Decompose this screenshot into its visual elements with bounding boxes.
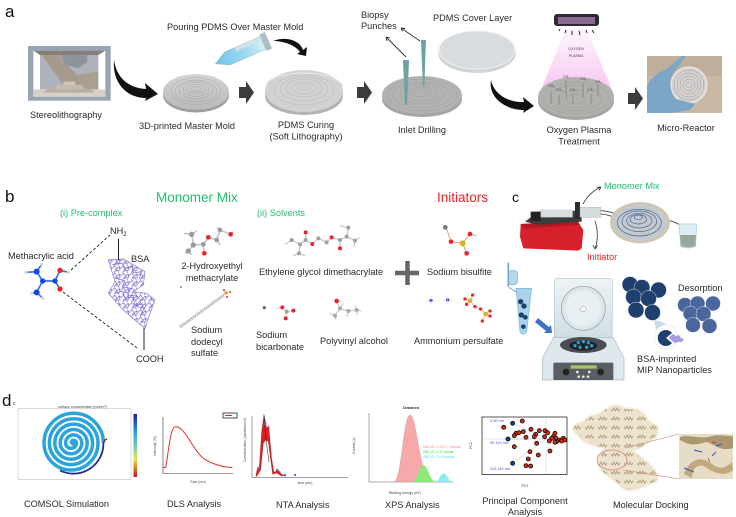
XPS spectrum chart: 288.12: C=O bonds bbox=[423, 455, 454, 459]
pre-complex labels: 2 bbox=[123, 232, 127, 238]
principal component scatter plot: 0-90 nm bbox=[490, 419, 504, 423]
step captions bbox=[30, 10, 715, 146]
plasma treated disc: CH₃ bbox=[556, 88, 563, 92]
HEMA caption: 2-Hydroxyethyl bbox=[181, 261, 243, 271]
SDS caption: dodecyl bbox=[191, 337, 223, 347]
tubing and microreactor chip bbox=[601, 202, 680, 243]
NTA concentration chart: size (nm) bbox=[298, 481, 312, 485]
monomer mix label: Monomer Mix bbox=[604, 181, 660, 191]
sodium bicarbonate caption: Sodium bbox=[256, 330, 287, 340]
XPS spectrum chart: Deashed bbox=[403, 406, 420, 410]
plasma label bbox=[568, 47, 584, 58]
EGDMA caption: Ethylene glycol dimethacrylate bbox=[259, 267, 383, 277]
DLS intensity chart bbox=[153, 413, 237, 484]
porous particle cluster bbox=[678, 296, 720, 334]
HEMA caption: methacrylate bbox=[186, 273, 238, 283]
characterisation captions: COMSOL Simulation bbox=[24, 499, 109, 509]
inlet drilling disc with punches bbox=[382, 28, 462, 117]
block arrow 3 bbox=[628, 87, 643, 110]
plasma treated disc: CH₃ bbox=[548, 84, 555, 88]
step captions: (Soft Lithography) bbox=[269, 132, 343, 142]
plasma treated disc: CH₃ bbox=[595, 80, 602, 84]
molecular docking protein surface bbox=[573, 405, 680, 490]
micro-reactor photo bbox=[647, 56, 722, 113]
BSA connector lines bbox=[118, 239, 144, 350]
plasma treated disc: CH₃ bbox=[563, 75, 570, 79]
SDS caption bbox=[191, 325, 223, 358]
panel b: reagents bbox=[5, 187, 503, 364]
dashed links to BSA bbox=[63, 235, 137, 348]
step captions: Micro-Reactor bbox=[657, 123, 715, 133]
sodium dodecyl sulfate molecule bbox=[180, 286, 231, 327]
label b: b bbox=[5, 187, 14, 206]
pre-complex labels bbox=[8, 226, 164, 364]
heading: initiators: Initiators bbox=[437, 190, 488, 205]
centrifuge bbox=[542, 278, 624, 380]
BSA-imprinted caption: BSA-imprinted bbox=[637, 354, 696, 364]
pre-complex labels: NH bbox=[110, 226, 123, 236]
principal component scatter plot: PC1 bbox=[522, 484, 528, 488]
polyvinyl alcohol molecule bbox=[330, 299, 362, 320]
characterisation captions: NTA Analysis bbox=[276, 500, 330, 510]
label c: c bbox=[512, 189, 519, 205]
characterisation captions: XPS Analysis bbox=[385, 500, 440, 510]
HEMA caption bbox=[181, 261, 243, 283]
step captions: PDMS Curing bbox=[278, 120, 334, 130]
sodium bicarbonate caption: bicarbonate bbox=[256, 342, 304, 352]
plasma beam bbox=[540, 29, 613, 92]
microcentrifuge tube bbox=[508, 263, 532, 334]
pre-complex labels: BSA bbox=[131, 254, 150, 264]
characterisation captions: Analysis bbox=[508, 507, 543, 517]
principal component scatter plot: 90-110 nm bbox=[490, 441, 508, 445]
syringe pump bbox=[520, 202, 601, 251]
principal component scatter plot: PC2 bbox=[469, 442, 473, 449]
panel d: characterisation bbox=[2, 391, 733, 517]
XPS spectrum chart bbox=[352, 406, 461, 495]
desorption caption: Desorption bbox=[678, 283, 722, 293]
blue arrow bbox=[535, 318, 552, 333]
ammonium persulfate molecule bbox=[426, 293, 492, 323]
plasma label: OXYGEN bbox=[568, 47, 584, 51]
monomer and initiator pointer arrows bbox=[583, 187, 601, 249]
step captions: 3D-printed Master Mold bbox=[139, 121, 235, 131]
step captions: Oxygen Plasma bbox=[547, 125, 612, 135]
sodium bisulfite molecule bbox=[443, 225, 476, 256]
BSA protein mesh bbox=[108, 259, 155, 328]
3D-printed master mold disc bbox=[163, 74, 229, 112]
principal component scatter plot: 110-140 nm bbox=[490, 467, 510, 471]
sodium bicarbonate molecule bbox=[263, 305, 295, 320]
characterisation captions: Molecular Docking bbox=[613, 500, 689, 510]
heading: monomer mix: Monomer Mix bbox=[156, 190, 238, 205]
characterisation captions bbox=[24, 496, 689, 517]
step captions: Inlet Drilling bbox=[398, 125, 446, 135]
COMSOL simulation plot: c bbox=[13, 401, 16, 407]
ethylene glycol dimethacrylate molecule bbox=[285, 226, 359, 256]
label a: a bbox=[5, 2, 15, 21]
BSA-imprinted caption: MIP Nanoparticles bbox=[637, 365, 712, 375]
NTA concentration chart: Concentration (particles/ml) bbox=[243, 418, 247, 462]
sodium bisulfite caption: Sodium bisulfite bbox=[427, 267, 492, 277]
PVA caption: Polyvinyl alcohol bbox=[320, 336, 388, 346]
MIP nanoparticle cluster bbox=[622, 276, 666, 320]
pre-complex labels: Methacrylic acid bbox=[8, 251, 74, 261]
ammonium persulfate caption: Ammonium persulfate bbox=[414, 336, 503, 346]
XPS spectrum chart: Counts (s) bbox=[352, 437, 356, 454]
pre-complex labels: COOH bbox=[136, 354, 164, 364]
characterisation captions: Principal Component bbox=[482, 496, 568, 506]
2-hydroxyethyl methacrylate molecule bbox=[184, 228, 233, 256]
collection beaker bbox=[679, 224, 697, 248]
SDS caption: sulfate bbox=[191, 348, 218, 358]
curved arrow: printer to mold bbox=[114, 60, 158, 101]
characterisation captions: DLS Analysis bbox=[167, 499, 222, 509]
panel a: fabrication workflow bbox=[5, 2, 722, 146]
block arrow 2 bbox=[357, 81, 372, 104]
magnified imprinted particle bbox=[654, 320, 684, 349]
step captions: Punches bbox=[361, 21, 397, 31]
docking site inset bbox=[679, 434, 733, 479]
PDMS pouring tube bbox=[212, 32, 272, 72]
BSA-imprinted caption bbox=[637, 354, 712, 375]
step captions: Stereolithography bbox=[30, 110, 102, 120]
PDMS cover layer disc bbox=[438, 31, 516, 73]
initiator label: Initiator bbox=[587, 252, 617, 262]
XPS spectrum chart: 284.15: C-C/C-H bonds bbox=[423, 445, 461, 449]
SDS caption: Sodium bbox=[191, 325, 222, 335]
plasma treated disc bbox=[538, 75, 614, 120]
heading: pre-complex: (i) Pre-complex bbox=[60, 208, 123, 218]
stereolithography printer icon bbox=[28, 46, 111, 101]
plasma treated disc: CH₃ bbox=[587, 88, 594, 92]
heading: solvents: (ii) Solvents bbox=[257, 208, 305, 218]
block arrow 1 bbox=[239, 81, 254, 104]
step captions: Pouring PDMS Over Master Mold bbox=[167, 22, 303, 32]
XPS spectrum chart: Binding energy (eV) bbox=[389, 491, 421, 495]
plasma treated disc: CH₃ bbox=[580, 77, 587, 81]
sodium bicarbonate caption bbox=[256, 330, 304, 352]
XPS spectrum chart: 286.10: C-O bonds bbox=[423, 450, 454, 454]
label d: d bbox=[2, 391, 11, 410]
curved arrow: to plasma bbox=[491, 80, 534, 113]
plasma treated disc: CH₃ bbox=[570, 88, 577, 92]
DLS intensity chart: Intensity (%) bbox=[153, 436, 157, 456]
COMSOL simulation plot: surface concentration (mol/m³) bbox=[58, 405, 107, 409]
step captions: Treatment bbox=[558, 136, 600, 146]
step captions: PDMS Cover Layer bbox=[433, 13, 512, 23]
NTA concentration chart bbox=[243, 414, 348, 485]
DLS intensity chart: Size (nm) bbox=[190, 480, 206, 484]
curved arrow: tube to curing bbox=[273, 39, 307, 56]
COMSOL simulation plot bbox=[13, 401, 137, 480]
plasma lamp bbox=[554, 14, 599, 35]
panel c: synthesis setup bbox=[508, 181, 722, 380]
methacrylic acid molecule bbox=[24, 263, 70, 300]
plus sign bbox=[395, 261, 419, 285]
PDMS curing disc bbox=[265, 70, 343, 115]
plasma label: PLASMA bbox=[569, 54, 584, 58]
principal component scatter plot bbox=[469, 417, 567, 488]
step captions: Biopsy bbox=[361, 10, 389, 20]
